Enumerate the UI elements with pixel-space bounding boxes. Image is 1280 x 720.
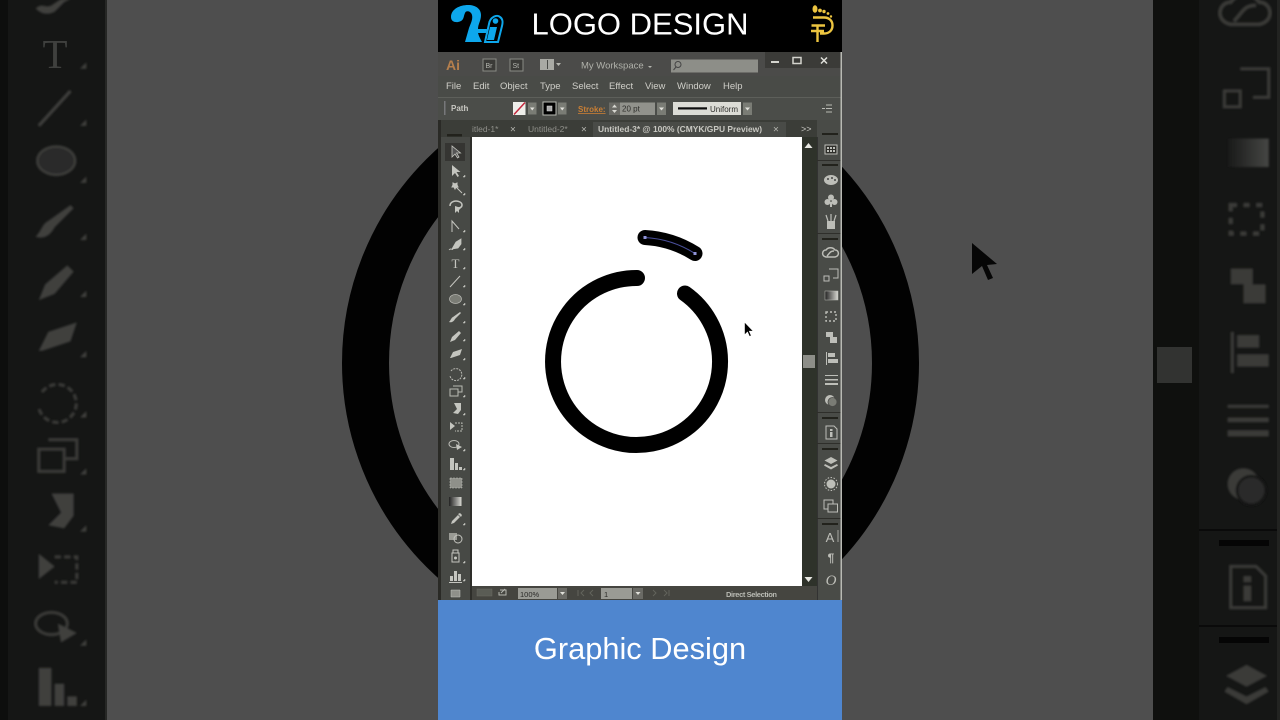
caption: Graphic Design xyxy=(534,631,746,666)
panel icon: paragraph: ¶ xyxy=(828,551,835,565)
background cursor xyxy=(972,243,997,280)
title: LOGO DESIGN xyxy=(531,6,749,42)
tool: type T: T xyxy=(452,256,460,271)
panel: left tools xyxy=(438,120,472,600)
panel: document tabs: itled-1* xyxy=(472,124,499,134)
panel icon: character: A xyxy=(826,530,835,545)
panel: document tabs: Untitled-3* @ 100% (CMYK/GPU Preview) xyxy=(598,124,762,134)
panel: menu bar: View xyxy=(645,81,666,92)
panel: document tabs: × xyxy=(581,124,587,136)
icon: fill swatch xyxy=(513,102,526,115)
panel: status bar: 1 xyxy=(604,590,608,599)
window background xyxy=(438,52,842,600)
panel: menu bar: Effect xyxy=(609,81,633,92)
panel: title bar xyxy=(438,52,842,76)
background enlarged ring xyxy=(366,98,896,628)
background tool icons xyxy=(36,0,86,706)
right edge highlight xyxy=(840,52,842,600)
panel: menu bar: Edit xyxy=(473,81,490,92)
artwork: selected arc segment with path xyxy=(644,236,696,255)
panel: menu bar xyxy=(438,76,842,97)
panel: menu bar: Object xyxy=(500,81,528,92)
artwork: open ring xyxy=(553,278,720,445)
panel: control bar xyxy=(438,97,842,120)
panel: menu bar: Select xyxy=(572,81,599,92)
panel: vertical scrollbar xyxy=(802,137,817,586)
panel: status bar: 100% xyxy=(520,590,540,599)
icon: mouse cursor xyxy=(744,322,753,336)
panel: document tabs: × xyxy=(510,124,516,136)
panel: bottom caption bar xyxy=(438,600,842,720)
background left toolbar xyxy=(0,0,107,720)
panel: title bar: St xyxy=(512,63,519,70)
background panel icons xyxy=(1220,0,1270,704)
panel: menu bar: File xyxy=(446,81,461,92)
panel: status bar: Direct Selection xyxy=(726,590,777,599)
icon: yellow footprint logo xyxy=(811,5,832,42)
panel: title bar: Br xyxy=(486,63,493,70)
panel: menu bar: Help xyxy=(723,81,743,92)
panel: document tabs: Untitled-2* xyxy=(528,124,568,134)
background right dock xyxy=(1153,0,1280,720)
Illustrator application window xyxy=(438,52,842,600)
panel: control bar: Stroke: xyxy=(578,105,606,114)
panel: menu bar: Window xyxy=(677,81,711,92)
panel: document tabs xyxy=(438,120,842,137)
panel: control bar: Uniform xyxy=(710,105,738,114)
panel icons xyxy=(823,145,838,542)
tool icons xyxy=(449,146,462,597)
panel: control bar: 20 pt xyxy=(622,104,641,114)
icon: stroke swatch xyxy=(543,102,556,115)
icon: blue brand logo xyxy=(451,5,503,42)
panel: title bar: Ai xyxy=(446,57,460,73)
tool corner arrows xyxy=(463,175,465,581)
panel: title bar: My Workspace xyxy=(581,60,644,72)
panel: top header bar xyxy=(438,0,842,52)
panel: control bar: Path xyxy=(451,104,468,113)
panel: status bar xyxy=(471,586,817,600)
panel icon: opentype: O xyxy=(826,573,837,589)
panel: menu bar: Type xyxy=(540,81,561,92)
panel: artboard canvas xyxy=(472,137,802,586)
panel: document tabs: >> xyxy=(801,124,812,134)
panel: document tabs: × xyxy=(773,124,779,136)
panel: right dock xyxy=(817,120,841,600)
background type tool T: T xyxy=(42,31,68,77)
